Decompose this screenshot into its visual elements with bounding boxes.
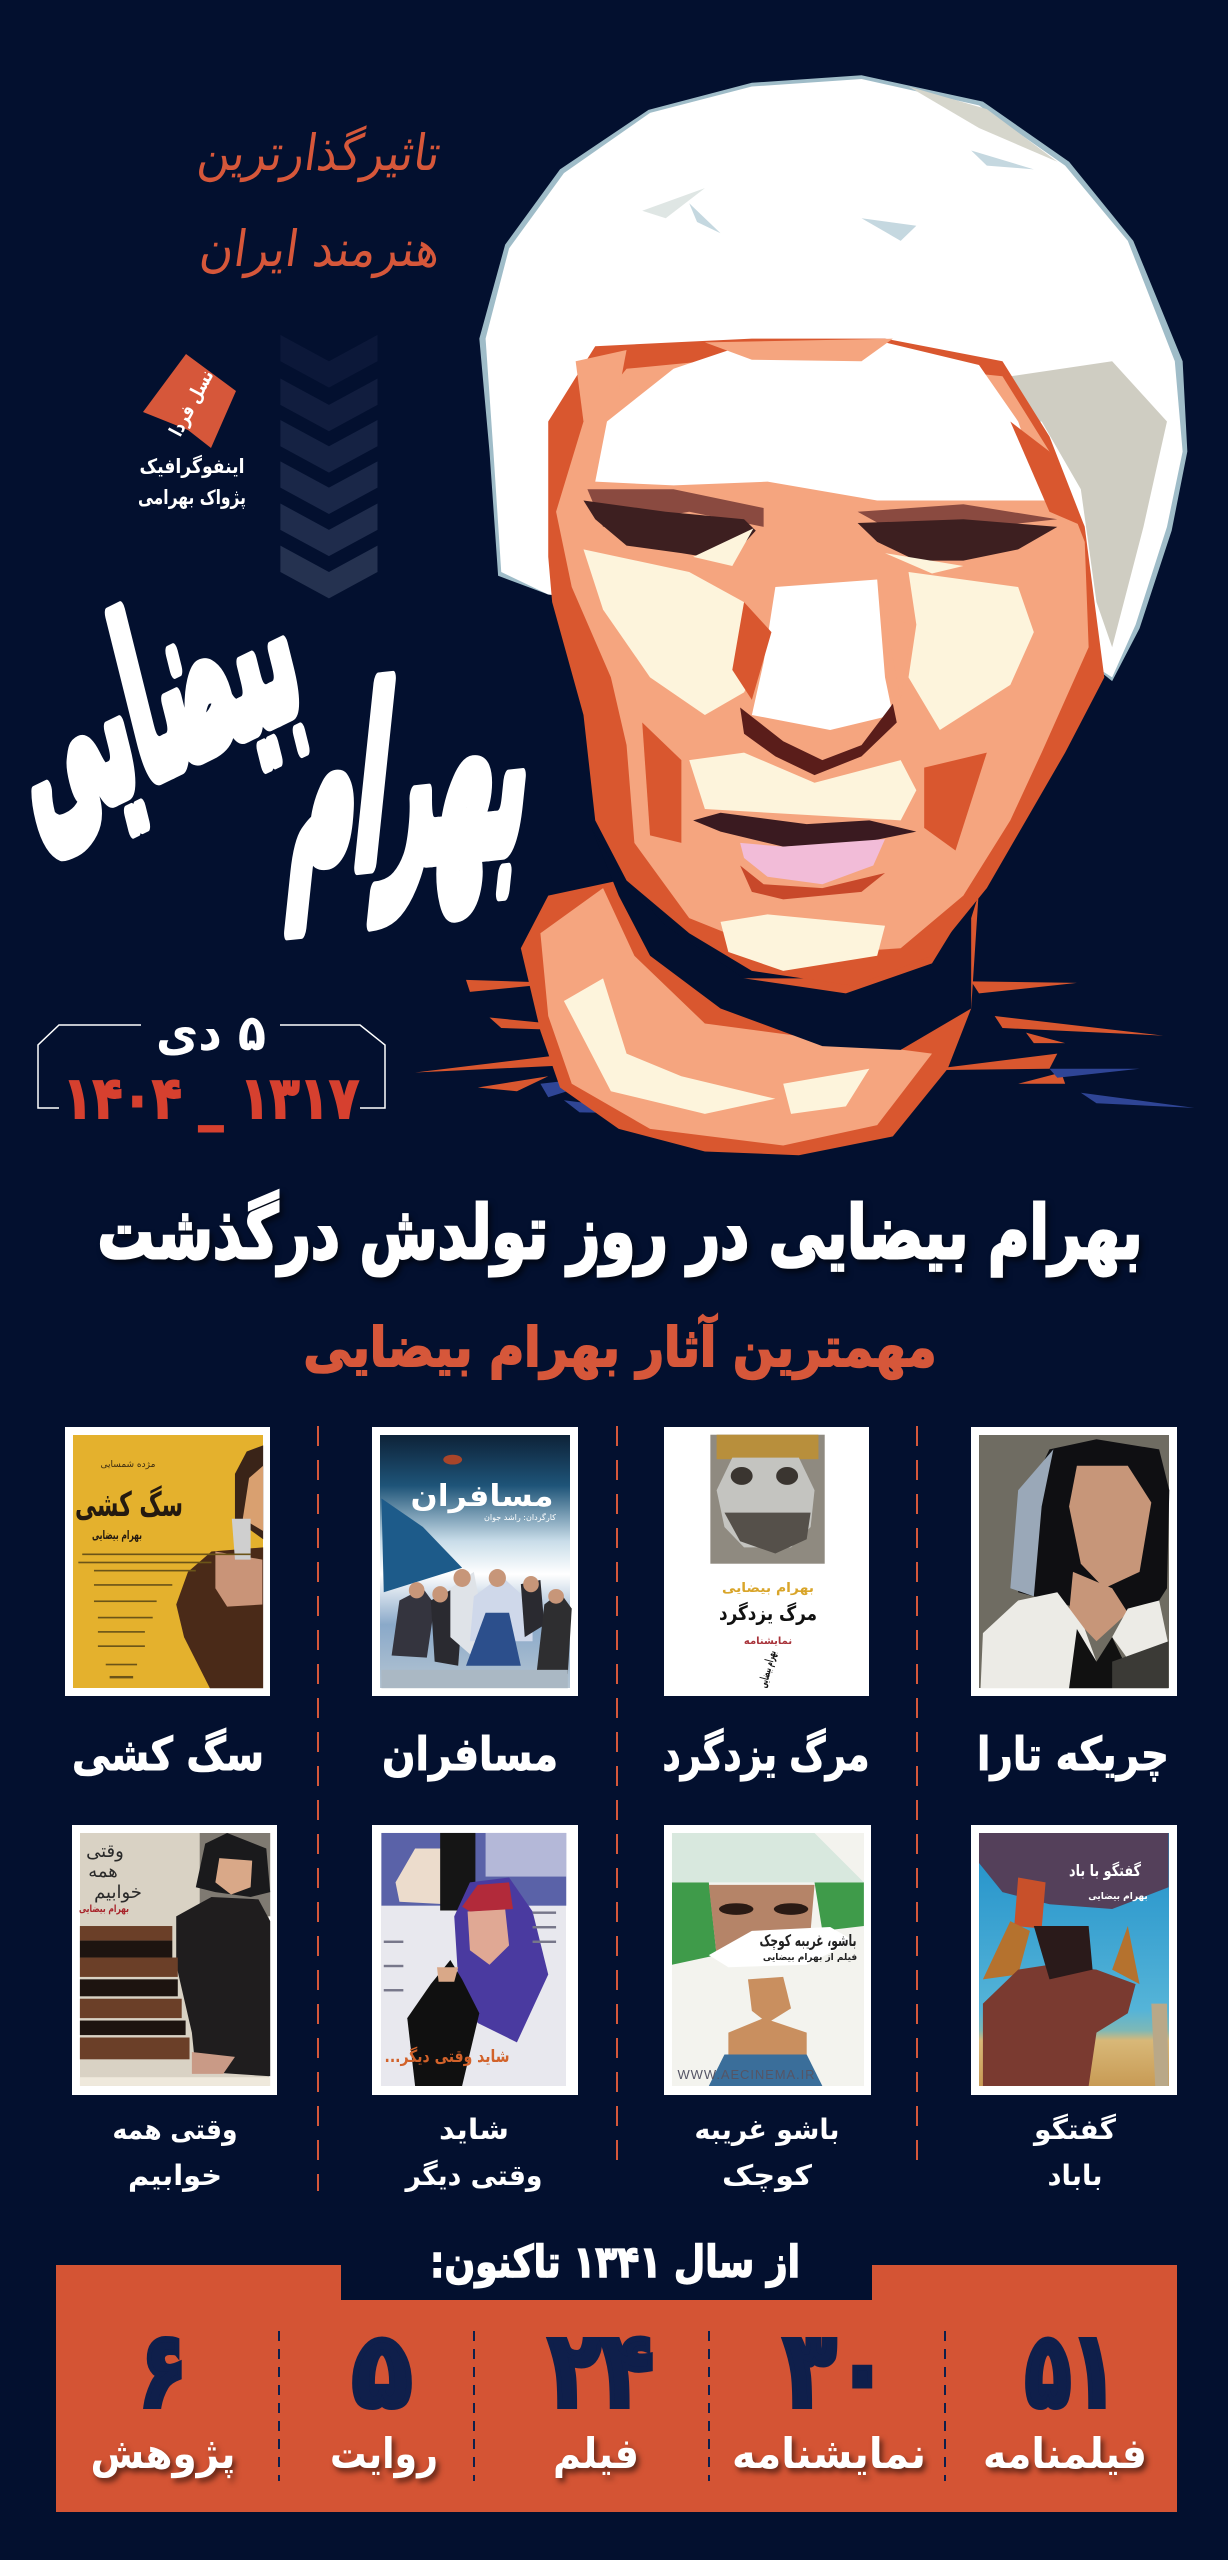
cheeks [583,549,768,715]
logo and credit [138,354,246,510]
poster: Shayad Vaghti Digar [372,1825,578,2095]
nose [752,580,893,730]
film titles row two: باشو غریبه [694,2113,840,2146]
film titles row one [72,1727,1169,1782]
credit text: پژواک بهرامی [138,485,246,510]
stats panel [56,2237,1177,2512]
hair [479,75,1187,681]
stat: research: ۶ [139,2309,187,2431]
stat: screenplays: فیلمنامه [983,2429,1147,2478]
film titles row one: چریکه تارا [977,1727,1169,1782]
poster: Sag Koshi: مژده شمسایی [101,1460,156,1470]
poster: Bashu: WWW.AECINEMA.IR [678,2067,814,2082]
forehead [595,342,1046,500]
poster: Goftogu ba Bad [971,1825,1177,2095]
poster: Sag Koshi: سگ کشی [75,1485,183,1525]
poster: Marg-e Yazdgerd [664,1427,869,1696]
calligraphic name: بهرام [282,625,545,932]
film titles row two: وقتی دیگر [404,2159,542,2192]
stat: plays: ۳۰ [784,2309,888,2431]
poster: Vaghti Hame Khabim: خوابیم [94,1882,142,1903]
subheading: مهمترین آثار بهرام بیضایی [304,1314,936,1379]
poster: Vaghti Hame Khabim: همه [88,1861,118,1882]
stat: narrations: ۵ [352,2309,412,2431]
poster: Mosafaran [372,1427,578,1696]
icon: logo mark [143,354,236,448]
face [548,339,1104,986]
stat: research: پژوهش [90,2429,236,2479]
credit text [138,454,246,510]
date box [38,1004,385,1132]
film titles row one: مرگ یزدگرد [662,1727,870,1781]
poster: Goftogu ba Bad: بهرام بیضایی [1088,1892,1148,1902]
mouth [693,813,916,847]
stat: narrations [330,2309,438,2479]
poster: Vaghti Hame Khabim: بهرام بیضایی [79,1904,129,1915]
stat: plays: نمایشنامه [732,2429,926,2478]
stat: screenplays: ۵۱ [1025,2309,1117,2431]
poster: Marg-e Yazdgerd: مرگ یزدگرد [719,1601,817,1625]
stat: narrations: روایت [330,2429,438,2479]
tagline: most influential artist [194,123,445,279]
poster: Bashu: باشو، غریبه کوچک [760,1931,856,1951]
tagline: most influential artist: هنرمند ایران [196,219,445,279]
film titles row two: گفتگو [1032,2113,1117,2146]
stat: research [90,2309,236,2479]
poster: Marg-e Yazdgerd: نمایشنامه [744,1636,792,1647]
tagline: most influential artist: تاثیرگذارترین [194,123,445,183]
date box: ۵ دی [156,1004,266,1062]
eyes [587,489,764,527]
film titles row one: مسافران [382,1727,558,1781]
chevron arrow column [280,335,378,598]
calligraphic name [0,503,545,932]
stat: films: ۲۴ [548,2309,654,2431]
icon: logo mark: نسل فردا [165,366,218,440]
portrait of Bahram Beyzaie [415,75,1194,1155]
stats heading: از سال ۱۳۴۱ تاکنون: [430,2237,800,2288]
stat: films: فیلم [553,2429,639,2478]
column dividers [318,1426,917,2191]
credit text: اینفوگرافیک [140,454,244,478]
poster: Bashu [664,1825,871,2095]
stat: screenplays [983,2309,1147,2478]
stat: plays [732,2309,926,2478]
poster: Goftogu ba Bad: گفتگو با باد [1069,1861,1142,1880]
poster: Shayad Vaghti Digar: شاید وقتی دیگر... [384,2046,510,2067]
film titles row two: خوابیم [128,2159,222,2192]
poster: Vaghti Hame Khabim [72,1825,277,2095]
film titles row two: باباد [1048,2159,1102,2192]
date box: ۱۳۱۷ _ ۱۴۰۴ [63,1064,359,1132]
neck stripes [415,980,1194,1114]
film titles row one: سگ کشی [72,1727,264,1781]
film titles row two: شاید [439,2113,509,2146]
neck [521,828,983,1155]
poster: Mosafaran: مسافران [410,1479,554,1514]
poster: Marg-e Yazdgerd: بهرام بیضایی [755,1649,780,1689]
poster: Mosafaran: کارگردان: راشد جوان [484,1512,556,1522]
poster: Bashu: فیلم از بهرام بیضایی [763,1953,857,1963]
film titles row two: وقتی همه [112,2113,238,2146]
poster: Marg-e Yazdgerd: بهرام بیضایی [722,1581,814,1596]
poster: Sag Koshi: بهرام بیضایی [92,1528,142,1543]
poster: Sag Koshi [65,1427,270,1696]
poster: Cherikeh Tara [971,1427,1177,1696]
film titles row two: کوچک [722,2159,813,2192]
stat: films [548,2309,654,2478]
poster: Vaghti Hame Khabim: وقتی [86,1841,124,1862]
film titles row two [112,2113,1117,2192]
